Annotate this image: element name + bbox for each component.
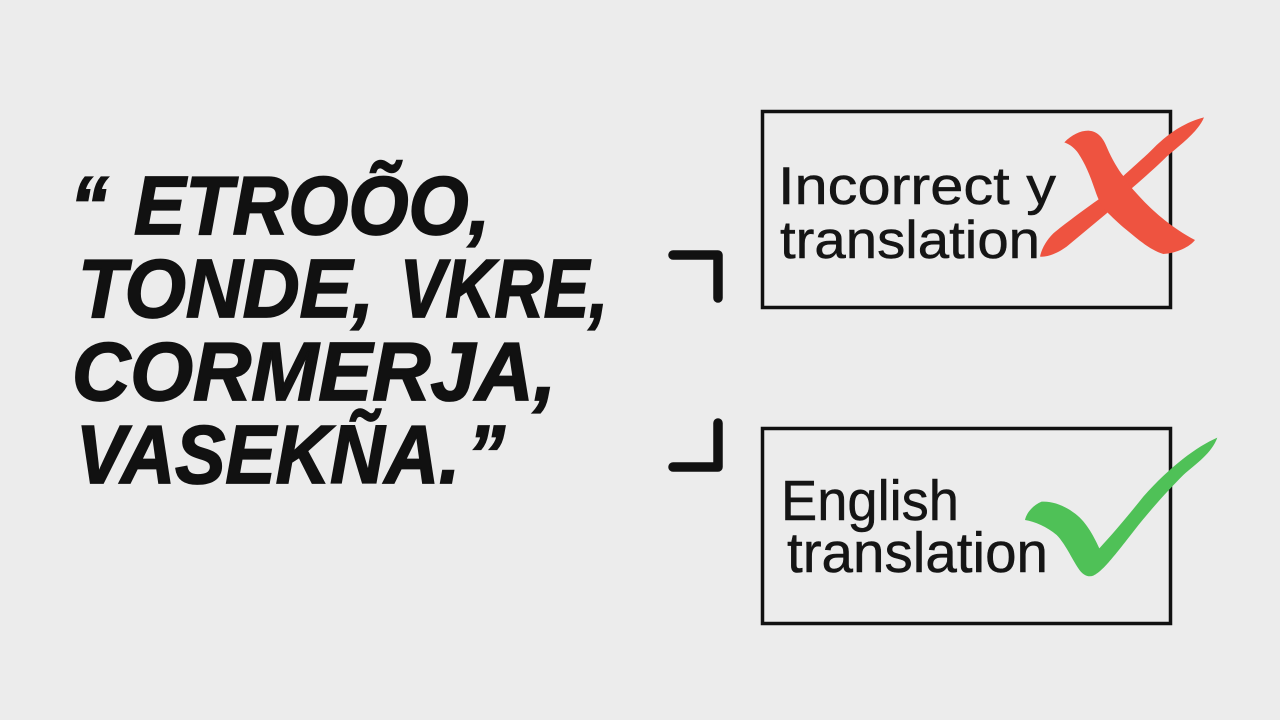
quote text block (70, 159, 608, 501)
icon: red cross (1040, 117, 1204, 257)
quote text block: ” (467, 408, 505, 501)
quote text block: TONDE, (78, 242, 374, 335)
upper connector bracket (673, 255, 718, 298)
correct label: translation (787, 521, 1048, 585)
quote text block: VASEKÑA. (76, 408, 460, 501)
incorrect label (778, 157, 1057, 270)
panel: English translation (762, 428, 1217, 624)
quote text block: CORMERJA, (72, 325, 556, 418)
panel: incorrect translation (762, 112, 1204, 308)
incorrect label: Incorrect y (778, 157, 1057, 216)
lower connector bracket (673, 423, 718, 467)
correct label (781, 469, 1048, 585)
quote text block: ETROÕO, (134, 159, 490, 252)
quote text block: “ (70, 159, 108, 252)
correct label: English (781, 469, 959, 533)
quote text block: VKRE, (400, 242, 608, 335)
incorrect label: translation (780, 211, 1040, 270)
icon: green check (1025, 438, 1217, 576)
